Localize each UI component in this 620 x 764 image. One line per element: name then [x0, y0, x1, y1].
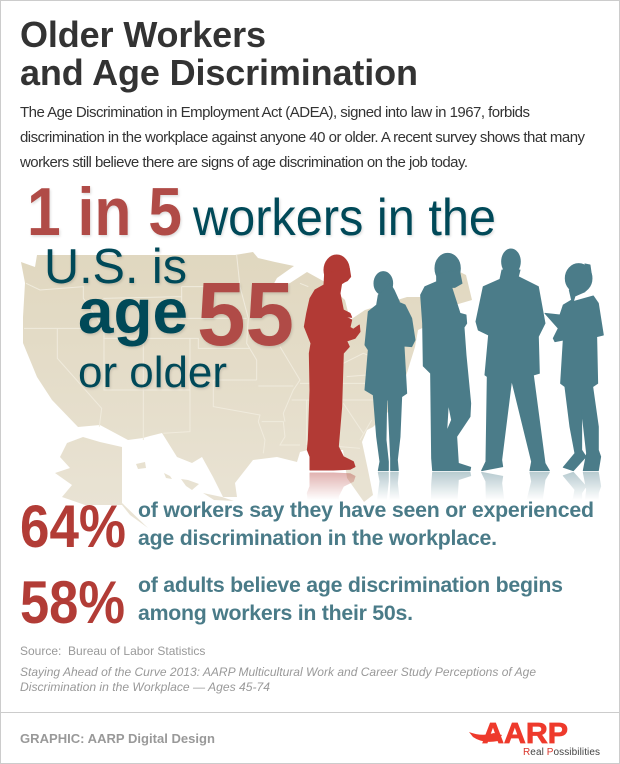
headline: 1 in 5 workers in the U.S. is age 55 or older: workers in the: [192, 189, 496, 247]
stat: 64%: 64%: [20, 493, 126, 560]
headline: 1 in 5 workers in the U.S. is age 55 or older: [27, 174, 496, 397]
intro text: [19, 104, 586, 171]
map: Hawaii: [136, 462, 199, 490]
headline: 1 in 5 workers in the U.S. is age 55 or older: 55: [197, 265, 294, 365]
logo: AARP: [469, 718, 600, 758]
headline: 1 in 5 workers in the U.S. is age 55 or older: 1 in 5: [27, 174, 182, 250]
source notes: Discrimination in the Workplace — Ages 45-74: [20, 680, 270, 694]
headline: 1 in 5 workers in the U.S. is age 55 or older: U.S. is: [44, 240, 187, 294]
intro text: The Age Discrimination in Employment Act (ADEA), signed into law in 1967, forbids: [20, 104, 530, 121]
title: [20, 14, 418, 93]
title: Older Workers: [20, 14, 266, 55]
stat: 58%: [20, 569, 563, 636]
source notes: Source: Bureau of Labor Statistics: [20, 644, 205, 658]
headline: 1 in 5 workers in the U.S. is age 55 or older: or older: [78, 348, 227, 397]
silhouettes: floor reflection: [307, 472, 602, 497]
logo: AARP: Real Possibilities: [523, 747, 600, 758]
stat: 58%: among workers in their 50s.: [138, 601, 413, 625]
stat: 58%: 58%: [20, 569, 125, 636]
stat: 64%: age discrimination in the workplace.: [138, 526, 497, 550]
intro text: discrimination in the workplace against anyone 40 or older. A recent survey shows that many: [20, 129, 586, 146]
stat: 64%: [20, 493, 594, 560]
map: Alaska: [55, 437, 148, 528]
headline: 1 in 5 workers in the U.S. is age 55 or older: age: [78, 277, 188, 347]
stat: 58%: of adults believe age discrimination begins: [138, 573, 563, 597]
map: United States: [21, 252, 472, 528]
source notes: Staying Ahead of the Curve 2013: AARP Multicultural Work and Career Study Perceptions of Age: [20, 665, 536, 679]
footer credit: GRAPHIC: AARP Digital Design: [20, 731, 215, 746]
intro text: workers still believe there are signs of age discrimination on the job today.: [19, 154, 468, 171]
title: and Age Discrimination: [20, 52, 418, 93]
source notes: [20, 644, 536, 694]
silhouettes: group of workers: [304, 249, 603, 471]
logo: AARP: AARP: [482, 718, 568, 750]
stat: 64%: of workers say they have seen or experienced: [138, 498, 594, 522]
map: Mexico edge: [203, 493, 234, 501]
